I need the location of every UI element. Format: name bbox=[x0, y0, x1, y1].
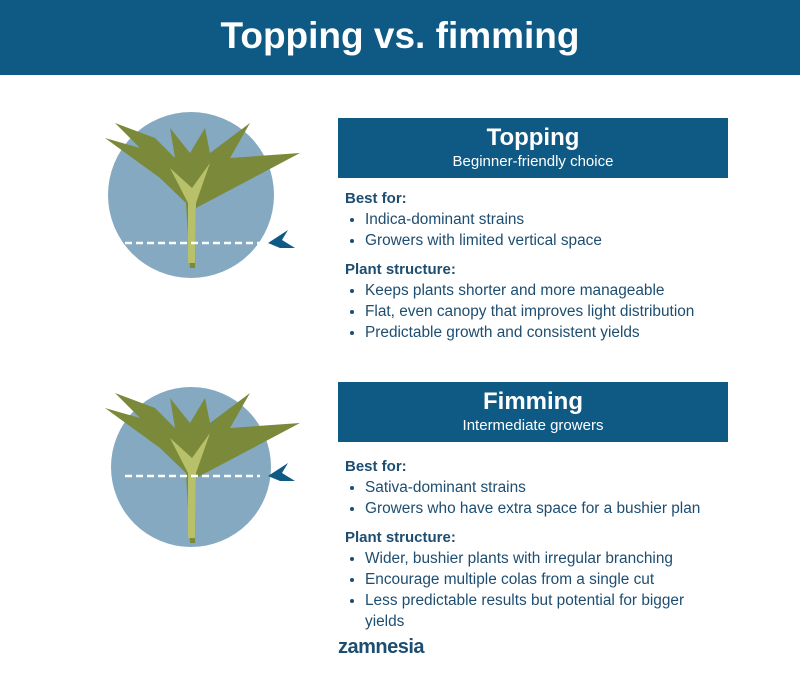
text: topping details: Predictable growth and consistent yields bbox=[365, 324, 640, 341]
text: fimming details: Growers who have extra space for a bushier plan bbox=[365, 500, 700, 517]
panel: topping: Topping bbox=[487, 124, 579, 151]
icon: fimming plant bbox=[105, 387, 300, 547]
panel: fimming bbox=[338, 382, 728, 442]
text: fimming details: Sativa-dominant strains bbox=[365, 479, 526, 496]
text: topping details: Keeps plants shorter and more manageable bbox=[365, 282, 664, 299]
panel: topping: Beginner-friendly choice bbox=[453, 153, 613, 170]
icon: topping plant bbox=[105, 112, 300, 278]
text: fimming details: Encourage multiple colas from a single cut bbox=[365, 571, 654, 588]
text: topping details bbox=[345, 190, 694, 341]
title: Topping vs. fimming bbox=[220, 15, 580, 56]
text: fimming details: Best for: bbox=[345, 458, 407, 475]
text: fimming details: Less predictable results but potential for bigger yields bbox=[365, 592, 684, 630]
panel: topping bbox=[338, 118, 728, 178]
text: topping details: Best for: bbox=[345, 190, 407, 207]
text: fimming details: Plant structure: bbox=[345, 529, 456, 546]
text: topping details: Growers with limited vertical space bbox=[365, 232, 602, 249]
text: topping details: Flat, even canopy that improves light distribution bbox=[365, 303, 694, 320]
text: fimming details bbox=[345, 458, 700, 630]
panel: fimming: Fimming bbox=[483, 388, 583, 415]
panel: fimming: Intermediate growers bbox=[463, 417, 603, 434]
text: topping details: Plant structure: bbox=[345, 261, 456, 278]
text: topping details: Indica-dominant strains bbox=[365, 211, 524, 228]
logo: zamnesia bbox=[338, 636, 424, 658]
title bbox=[0, 0, 800, 75]
text: fimming details: Wider, bushier plants with irregular branching bbox=[365, 550, 673, 567]
